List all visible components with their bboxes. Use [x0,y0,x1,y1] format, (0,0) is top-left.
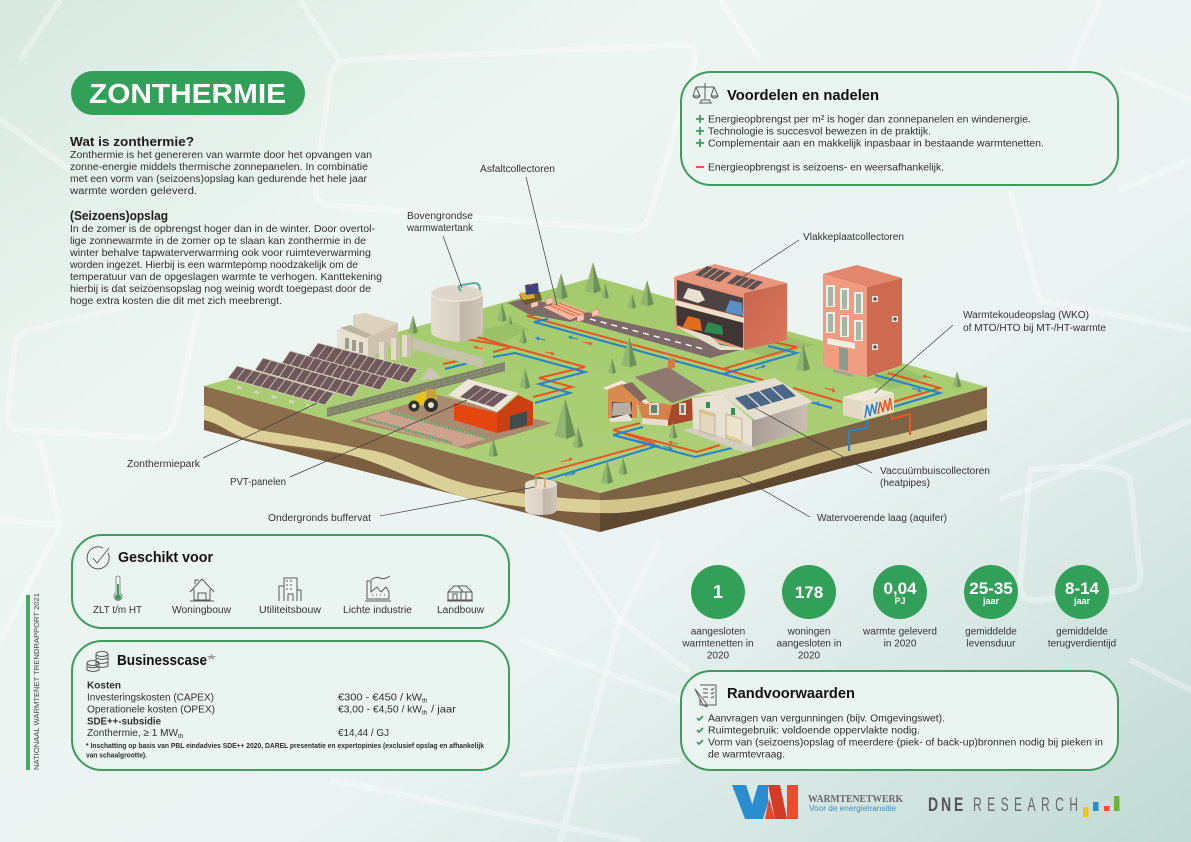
advantage list [696,114,1044,150]
cost rows: / jaar [431,704,457,716]
asphalt collectors [508,297,599,322]
text block: seizoensopslag: winter behalve tapwaterverwarming ook voor ruimteverwarming [69,248,371,259]
item: utiliteitsbouw: Utiliteitsbouw [259,605,322,616]
label: watervoerende laag [737,475,947,524]
label: vacuumbuiscollectoren: Vaccuümbuiscollectoren [880,466,990,477]
side label: rapport [26,593,41,770]
cost rows: Kosten [87,680,121,692]
stat: warmte geleverd: PJ [894,596,906,606]
label: vlakkeplaatcollectoren: Vlakkeplaatcollectoren [803,232,904,243]
cost rows: Operationele kosten (OPEX) [87,704,215,716]
conditions list: de warmtevraag. [708,750,785,760]
cost rows: €14,44 / GJ [338,728,389,739]
underground buffer tank [525,475,557,515]
farm plot [350,395,552,449]
stat: warmte geleverd: warmte geleverd [862,626,937,638]
item: woningbouw [172,579,232,616]
text block: seizoensopslag: temperatuur van de opgeslagen warmte te verhogen. Kanttekening [70,272,382,283]
conditions list: Ruimtegebruik: voldoende oppervlakte nodig. [708,726,920,736]
grass surface [204,277,987,493]
icon: check circle [87,547,109,569]
panel: geschikt voor [72,535,509,628]
item: utiliteitsbouw [259,578,322,616]
item: lichte industrie [343,576,412,616]
label: asfaltcollectoren: Asfaltcollectoren [480,164,555,175]
label: zonthermiepark: Zonthermiepark [127,459,201,470]
logo: dne research: RESEARCH [973,794,1083,816]
stat: levensduur: gemiddelde [965,626,1017,638]
stat: woningen aangesloten: 2020 [798,650,821,662]
stone wall [327,362,505,417]
side label: rapport: NATIONAAL WARMTENET TRENDRAPPORT 2021 [32,593,41,770]
stat: woningen aangesloten [776,565,842,662]
stat: warmte geleverd [862,565,937,650]
tree near warehouse [669,422,677,439]
stat: terugverdientijd [1048,565,1116,650]
icon: checklist [695,685,716,707]
pipes [443,313,940,480]
panel: voordelen en nadelen [681,72,1118,185]
soil block [204,386,987,532]
stat: woningen aangesloten: 178 [795,583,823,602]
stat: woningen aangesloten: woningen [787,626,830,638]
item: landbouw: Landbouw [437,605,485,616]
cost rows: €3,00 - €4,50 / kW [338,704,422,716]
icon: coins [87,652,108,672]
parking building with flat plate collectors [674,264,787,350]
parked cars [675,288,744,350]
stat: levensduur: jaar [982,596,1000,606]
label: warmtekoudeopslag: of MTO/HTO bij MT-/HT-warmte [963,323,1106,334]
text block: wat is zonthermie: met een vorm van (seizoens)opslag kan gedurende het hele jaar [70,174,368,185]
text block: seizoensopslag: worden ingezet. Hierbij is een warmtepomp noodzakelijk om de [69,260,358,271]
item: ZLT t/m HT [93,576,142,616]
mid trees [488,337,810,484]
text block: seizoensopslag: lige zonnewarmte in de zomer op te slaan kan zonthermie in de [70,236,366,247]
barn [448,379,533,433]
conditions list: Aanvragen van vergunningen (bijv. Omgevingswet). [708,714,945,724]
panel: businesscase: * [207,651,217,667]
label: warmtekoudeopslag [875,310,1106,393]
text block: seizoensopslag: hierbij is dat seizoensopslag nog weinig wordt toegepast door de [70,284,371,295]
asphalt roller machine [519,283,542,305]
cost rows: th [178,733,184,740]
isometric scene [204,262,987,532]
logo: dne research: DNE [928,794,966,816]
panel: randvoorwaarden [681,671,1118,770]
stat: warmte geleverd: in 2020 [884,638,917,650]
logo: warmtenetwerk: Voor de energietransitie [809,804,897,813]
stat: levensduur: levensduur [967,638,1016,650]
fence [412,338,483,368]
panel: businesscase [72,641,509,770]
label: vacuumbuiscollectoren [750,405,990,489]
WKO heat exchanger [843,388,910,451]
stat: terugverdientijd: 8-14 [1065,579,1100,598]
label: ondergronds buffervat: Ondergronds buffervat [268,513,371,524]
label: ondergronds buffervat [268,487,535,524]
text block: seizoensopslag: hoge extra kosten die dit met zich meebrengt. [70,296,282,307]
label: pvt-panelen [230,400,467,488]
text block: seizoensopslag: In de zomer is de opbrengst hoger dan in de winter. Door overtol- [70,224,375,235]
conditions list [697,714,1103,760]
above-ground warm water tank [431,283,483,342]
stat: aangesloten warmtenetten: warmtenetten in [681,638,754,650]
icon: scales [693,83,718,103]
panel: randvoorwaarden: Randvoorwaarden [727,686,855,702]
cost rows [87,680,457,740]
stat: aangesloten warmtenetten: 2020 [707,650,730,662]
stat: aangesloten warmtenetten: 1 [713,582,723,602]
text block: wat is zonthermie: zonne-energie middels thermische zonnepanelen. In combinatie [70,162,368,173]
stat: aangesloten warmtenetten [681,565,754,662]
stat: levensduur [964,565,1018,650]
stat: terugverdientijd: terugverdientijd [1048,638,1116,650]
stat: levensduur: 25-35 [969,579,1013,598]
text block: seizoensopslag: (Seizoens)opslag [70,208,168,223]
text block: wat is zonthermie: Wat is zonthermie? [70,134,194,149]
disadvantage list: Energieopbrengst is seizoens- en weersafhankelijk. [708,162,944,174]
logo: warmtenetwerk [732,785,903,819]
panel: voordelen en nadelen: Voordelen en nadelen [727,88,879,104]
stat: aangesloten warmtenetten: aangesloten [691,626,745,638]
panel: businesscase: Businesscase [117,653,207,669]
house [603,358,706,426]
solar park [228,343,442,410]
label: bovengrondse warmwatertank: Bovengrondse [407,211,473,222]
advantage list: Technologie is succesvol bewezen in de praktijk. [708,126,931,138]
ground shadows [480,322,925,390]
text block: wat is zonthermie: warmte worden geleverd. [69,186,197,197]
apartment building [823,265,902,377]
trees behind [408,262,961,388]
item: lichte industrie: Lichte industrie [343,605,412,616]
logo: dne research [928,794,1120,817]
label: vlakkeplaatcollectoren [735,232,904,282]
road [575,315,744,358]
title [71,71,305,115]
item: woningbouw: Woningbouw [172,605,232,616]
label: zonthermiepark [127,403,317,470]
tractor [408,389,438,412]
advantage list: Energieopbrengst per m² is hoger dan zonnepanelen en windenergie. [708,114,1031,126]
text block: seizoensopslag [69,208,382,307]
label: bovengrondse warmwatertank: warmwatertank [406,223,474,234]
stat: woningen aangesloten: aangesloten in [776,638,842,650]
item: ZLT t/m HT: ZLT t/m HT [93,605,142,616]
advantage list: Complementair aan en makkelijk inpasbaar in bestaande warmtenetten. [708,138,1044,150]
stat: warmte geleverd: 0,04 [883,579,917,598]
stat: terugverdientijd: gemiddelde [1056,626,1108,638]
label: warmtekoudeopslag: Warmtekoudeopslag (WKO) [963,310,1089,321]
warehouse with vacuum tube collectors [683,378,813,452]
cost rows: Investeringskosten (CAPEX) [87,692,214,704]
cost rows: €300 - €450 / kW [338,692,422,704]
label: pvt-panelen: PVT-panelen [230,477,286,488]
logo: warmtenetwerk: WARMTENETWERK [808,794,903,805]
label: asfaltcollectoren [480,164,557,305]
cost rows: th [422,710,428,716]
text block: wat is zonthermie: Zonthermie is het genereren van warmte door het opvangen van [70,150,372,161]
label: watervoerende laag: Watervoerende laag (aquifer) [817,513,947,524]
title: ZONTHERMIE [89,78,286,109]
panel: geschikt voor: Geschikt voor [118,550,213,566]
conditions list: Vorm van (seizoens)opslag of meerdere (piek- of back-up)bronnen nodig bij pieken in [708,738,1103,748]
stat: terugverdientijd: jaar [1073,596,1091,606]
footnote [86,741,485,760]
label: bovengrondse warmwatertank [406,211,474,288]
footnote: van schaalgrootte). [86,750,147,760]
heat station [337,313,411,361]
label: vacuumbuiscollectoren: (heatpipes) [880,478,930,489]
text block: wat is zonthermie [69,134,372,197]
cost rows: SDE++-subsidie [87,716,161,728]
cost rows: th [422,698,428,704]
item: landbouw [437,586,485,616]
footnote: * Inschatting op basis van PBL eindadvies SDE++ 2020, DAREL presentatie en expertopinies (exclusief opslag en afhankelijk [86,741,485,750]
cost rows: Zonthermie, ≥ 1 MW [87,728,178,739]
